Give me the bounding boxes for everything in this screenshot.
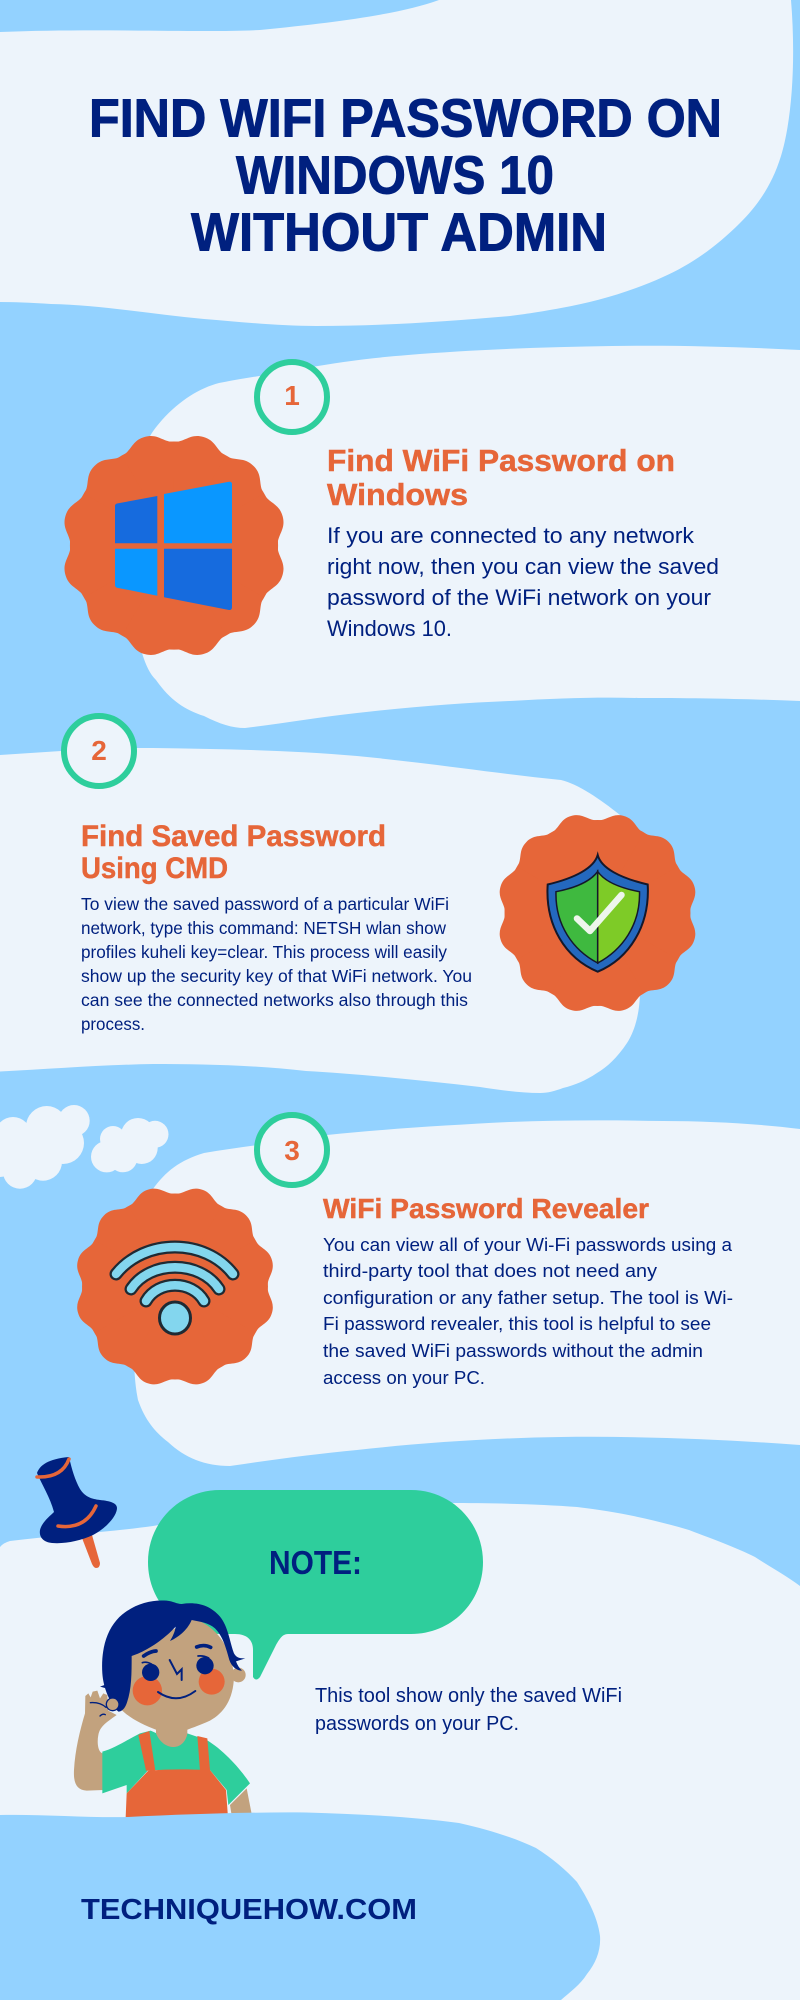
step 2 background shape xyxy=(0,748,640,1093)
step 2 body text: network, type this command: NETSH wlan show xyxy=(81,918,446,938)
step 2 heading: Find Saved Password xyxy=(81,820,386,853)
title: FIND WIFI PASSWORD ON xyxy=(89,88,722,148)
panel: note xyxy=(0,1457,800,2000)
icon: Windows logo on scalloped badge xyxy=(53,425,295,666)
panel: title xyxy=(0,0,793,326)
icon: push pin xyxy=(37,1457,117,1568)
step 2 heading: Using CMD xyxy=(81,852,228,885)
panel: step 1 find WiFi password on Windows xyxy=(53,346,800,728)
step 1 body text: If you are connected to any network xyxy=(327,523,695,548)
step 3 body text: Fi password revealer, this tool is helpful to see xyxy=(323,1313,711,1334)
note heading: NOTE: xyxy=(269,1544,362,1581)
title: WINDOWS 10 xyxy=(236,146,554,206)
step 1 body text: password of the WiFi network on your xyxy=(327,585,712,610)
shirt xyxy=(102,1731,250,1805)
brows, nose and smile xyxy=(142,1646,211,1698)
note body text xyxy=(315,1685,622,1735)
step 3 body text: You can view all of your Wi-Fi passwords using a xyxy=(323,1234,733,1255)
apron straps xyxy=(138,1731,155,1771)
step 2 body text: can see the connected networks also through this xyxy=(81,990,468,1010)
step 3 body text: access on your PC. xyxy=(323,1367,485,1388)
number badge 2: 2 xyxy=(91,735,107,766)
footer website text: TECHNIQUEHOW.COM xyxy=(81,1894,417,1926)
number badge 3: 3 xyxy=(284,1135,300,1166)
number badge 2 xyxy=(64,716,134,786)
step 3 heading: WiFi Password Revealer xyxy=(323,1193,649,1224)
step 2 body text: profiles kuheli key=clear. This process will easily xyxy=(81,942,447,962)
footer background shape xyxy=(0,1812,600,2000)
step 2 body text: process. xyxy=(81,1014,145,1034)
step 3 body text: configuration or any father setup. The tool is Wi- xyxy=(323,1287,733,1308)
step 1 background shape xyxy=(137,346,800,728)
hair xyxy=(102,1600,245,1712)
panel: step 3 WiFi password revealer xyxy=(0,1105,800,1466)
step 3 body text xyxy=(323,1234,733,1388)
step 2 heading xyxy=(81,820,386,885)
number badge 1: 1 xyxy=(284,380,300,411)
apron xyxy=(126,1769,228,1817)
step 1 heading: Windows xyxy=(327,477,468,512)
step 1 heading: Find WiFi Password on xyxy=(327,443,675,478)
icon: security shield on scalloped badge xyxy=(490,805,705,1021)
note body text: This tool show only the saved WiFi xyxy=(315,1685,622,1707)
title: WITHOUT ADMIN xyxy=(191,202,607,262)
step 3 body text: the saved WiFi passwords without the admin xyxy=(323,1340,703,1361)
title xyxy=(89,88,722,262)
number badge 1 xyxy=(257,362,327,432)
icon: WiFi symbol on scalloped badge xyxy=(67,1179,283,1394)
step 1 heading xyxy=(327,443,675,512)
hand details xyxy=(90,1703,106,1716)
panel: footer xyxy=(0,1812,600,2000)
raised arm and hand xyxy=(74,1691,117,1791)
step 1 body text xyxy=(327,523,719,641)
illustration: waving child xyxy=(74,1600,252,1817)
step 2 body text xyxy=(81,894,472,1034)
far arm xyxy=(230,1788,252,1817)
note background shape xyxy=(0,1500,800,2000)
step 3 body text: third-party tool that does not need any xyxy=(323,1260,658,1281)
step 1 body text: right now, then you can view the saved xyxy=(327,554,719,579)
ear xyxy=(231,1668,246,1682)
eyes xyxy=(142,1664,159,1681)
panel: step 2 find saved password using CMD xyxy=(0,716,705,1093)
cheeks xyxy=(133,1676,162,1705)
note body text: passwords on your PC. xyxy=(315,1713,519,1735)
step 2 body text: To view the saved password of a particular WiFi xyxy=(81,894,449,914)
title background shape xyxy=(0,0,793,326)
step 1 body text: Windows 10. xyxy=(327,616,452,641)
speech bubble xyxy=(148,1490,483,1680)
neck xyxy=(156,1723,187,1747)
number badge 3 xyxy=(257,1115,327,1185)
step 2 body text: show up the security key of that WiFi network. You xyxy=(81,966,472,986)
step 3 background shape xyxy=(134,1120,800,1466)
head xyxy=(122,1618,234,1730)
illustration: clouds xyxy=(0,1105,168,1189)
